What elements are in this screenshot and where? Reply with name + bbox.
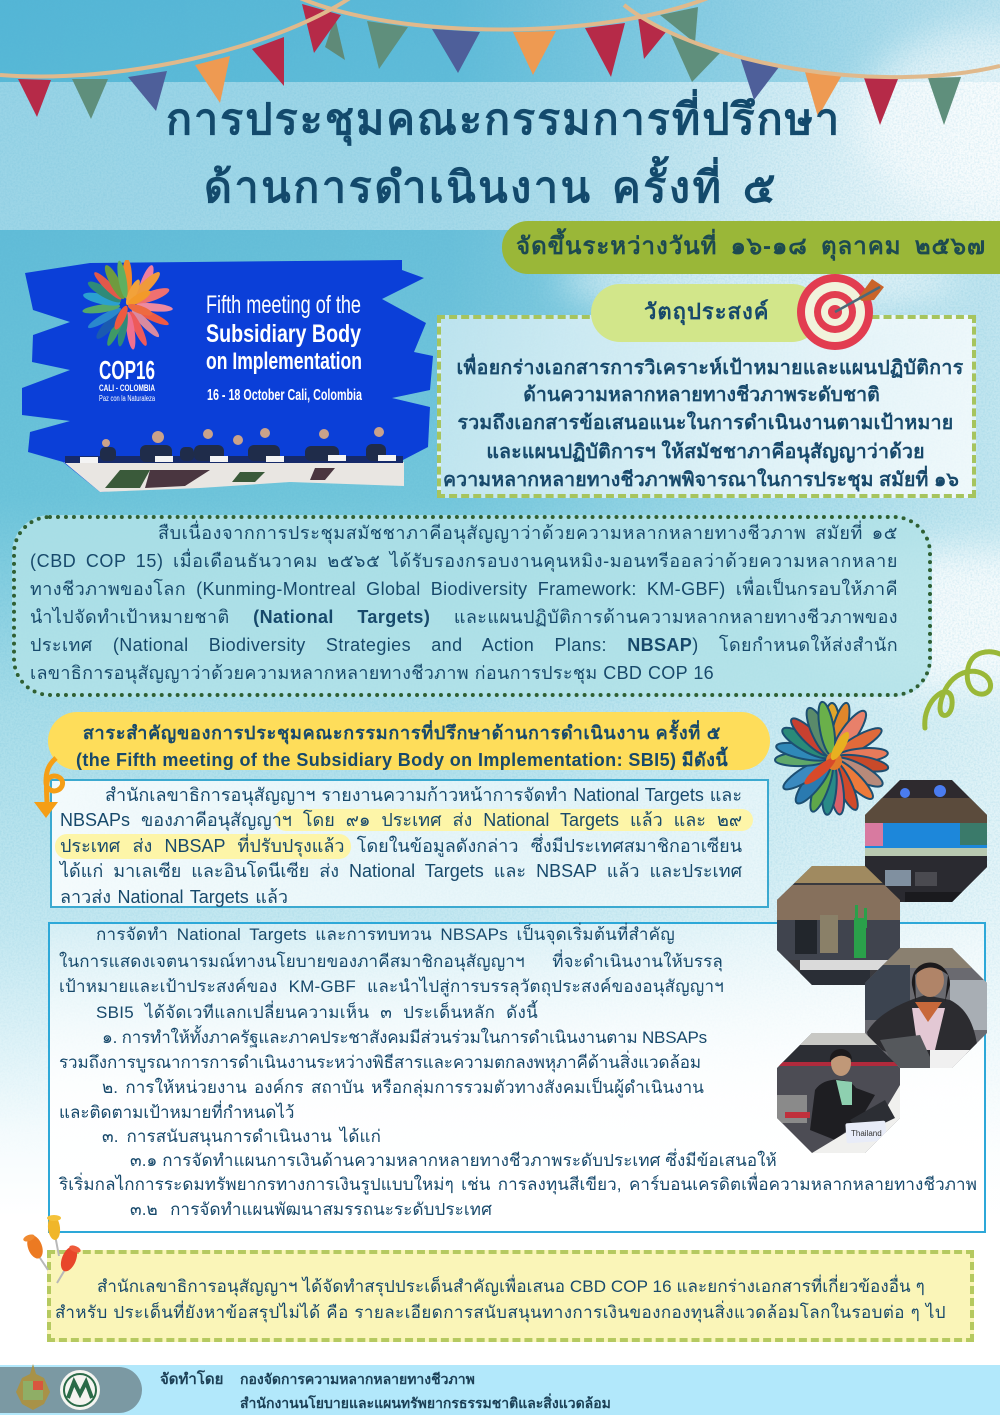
panel: main discussion: การจัดทำ National Targets และการทบทวน NBSAPs เป็นจุดเริ่มต้นที่สำคัญ bbox=[96, 925, 675, 944]
icon: orange curved arrow bbox=[34, 758, 63, 818]
key points heading pill: สาระสำคัญของการประชุมคณะกรรมการที่ปรึกษาด้านการดำเนินงาน ครั้งที่ ๕ bbox=[83, 723, 721, 743]
photo: Thailand delegate bbox=[777, 1033, 900, 1153]
icon: pushpins bbox=[22, 1215, 82, 1283]
panel: background context: สืบเนื่องจากการประชุมสมัชชาภาคีอนุสัญญาว่าด้วยความหลากหลายทางชีวภาพ สมัยที่ ๑๕ bbox=[158, 523, 898, 543]
panel: main discussion: ในการแสดงเจตนารมณ์ทางนโยบายของภาคีสมาชิกอนุสัญญาฯ ที่จะดำเนินงานให้บรรลุ bbox=[59, 952, 723, 971]
footer organiser label: จัดทำโดย bbox=[160, 1371, 223, 1388]
highlight bbox=[275, 809, 753, 831]
panel: conclusion: สำนักเลขาธิการอนุสัญญาฯ ได้จัดทำสรุปประเด็นสำคัญเพื่อเสนอ CBD COP 16 และยกร่างเอกสารที่เกี่ยวข้องอื่น ๆ bbox=[97, 1277, 925, 1296]
COP16 banner image: Subsidiary Body bbox=[206, 320, 361, 348]
bunting flags bbox=[0, 0, 1000, 125]
panel: main discussion: SBI5 ได้จัดเวทีแลกเปลี่ยนความเห็น ๓ ประเด็นหลัก ดังนี้ bbox=[96, 1003, 538, 1022]
panel: main discussion: ๓. การสนับสนุนการดำเนินงาน ได้แก่ bbox=[102, 1127, 381, 1146]
footer organisation names bbox=[240, 1371, 611, 1411]
title: การประชุมคณะกรรมการที่ปรึกษา bbox=[166, 96, 841, 144]
COP16 banner image: 16 - 18 October Cali, Colombia bbox=[207, 387, 362, 404]
footer logo plate bbox=[0, 1367, 142, 1413]
title bbox=[166, 88, 841, 212]
COP16 banner image bbox=[22, 260, 433, 492]
panel: objective: ด้านความหลากหลายทางชีวภาพระดับชาติ bbox=[523, 384, 880, 406]
icon: target with arrow bbox=[797, 274, 884, 350]
panel: main discussion: ๑. การทำให้ทั้งภาครัฐและภาคประชาสังคมมีส่วนร่วมในการดำเนินงานตาม NBSAPs bbox=[102, 1028, 707, 1047]
photo: Thailand delegate: Thailand bbox=[851, 1129, 882, 1138]
photo: delegates raising hands bbox=[777, 866, 900, 986]
COP16 banner image: Paz con la Naturaleza bbox=[99, 394, 155, 403]
panel: main discussion: เป้าหมายและเป้าประสงค์ของ KM-GBF และนำไปสู่การบรรลุวัตถุประสงค์ของอนุสัญญาฯ bbox=[59, 977, 724, 996]
panel: main discussion bbox=[48, 922, 986, 1233]
panel: progress report: ได้แก่ มาเลเซีย และอินโดนีเซีย ส่ง National Targets และ NBSAP แล้ว และประเทศ bbox=[60, 861, 742, 881]
panel: main discussion: รวมถึงการบูรณาการการดำเนินงานระหว่างพิธีสารและความตกลงพหุภาคีด้านสิ่งแวดล้อม bbox=[59, 1053, 701, 1072]
COP16 banner image: on Implementation bbox=[206, 348, 362, 375]
logos bbox=[16, 1364, 100, 1410]
panel: objective: รวมถึงเอกสารข้อเสนอแนะในการดำเนินงานตามเป้าหมาย bbox=[457, 412, 954, 434]
key points heading pill bbox=[48, 712, 770, 770]
date banner bbox=[502, 221, 1000, 274]
icon: decorative flower bbox=[775, 701, 889, 815]
logo: ministry crest bbox=[16, 1364, 50, 1410]
panel: progress report: ประเทศ ส่ง NBSAP ที่ปรับปรุงแล้ว โดยในข้อมูลดังกล่าว ซึ่งมีประเทศสมาชิกอาเซียน bbox=[60, 836, 742, 856]
panel: objective bbox=[437, 315, 976, 498]
COP16 flower logo bbox=[82, 259, 173, 350]
footer organisation names: กองจัดการความหลากหลายทางชีวภาพ bbox=[240, 1371, 475, 1387]
date banner: จัดขึ้นระหว่างวันที่ ๑๖-๑๘ ตุลาคม ๒๕๖๗ bbox=[516, 233, 986, 260]
panel: background context: ทางชีวภาพของโลก (Kunming-Montreal Global Biodiversity Framework: KM-GBF) เพื่อเป็นกรอบให้ภาคี bbox=[30, 579, 898, 599]
COP16 banner image: CALI - COLOMBIA bbox=[99, 383, 155, 393]
footer organisation names: สำนักงานนโยบายและแผนทรัพยากรธรรมชาติและสิ่งแวดล้อม bbox=[240, 1395, 611, 1411]
panel: main discussion: ๒. การให้หน่วยงาน องค์กร สถาบัน หรือกลุ่มการรวมตัวทางสังคมเป็นผู้ดำเนินงาน bbox=[102, 1078, 704, 1097]
foreground decorations bbox=[16, 700, 987, 1410]
objective heading pill bbox=[591, 284, 821, 342]
conference panel people bbox=[100, 444, 386, 462]
panel: main discussion: และติดตามเป้าหมายที่กำหนดไว้ bbox=[59, 1103, 294, 1122]
banner text: COP16 bbox=[99, 355, 155, 385]
panel: progress report bbox=[50, 779, 769, 908]
panel: main discussion: ๓.๑ การจัดทำแผนการเงินด้านความหลากหลายทางชีวภาพระดับประเทศ ซึ่งมีข้อเสนอให้ bbox=[130, 1151, 777, 1170]
highlight bbox=[55, 834, 351, 859]
panel: background context: (CBD COP 15) เมื่อเดือนธันวาคม ๒๕๖๕ ได้รับรองกรอบงานคุนหมิง-มอนทรีออลว่าด้วยความหลากหลาย bbox=[30, 551, 898, 571]
photo: delegate with laptop bbox=[865, 948, 988, 1068]
panel: objective: ความหลากหลายทางชีวภาพพิจารณาในการประชุม สมัยที่ ๑๖ bbox=[443, 469, 959, 491]
key points heading pill: (the Fifth meeting of the Subsidiary Body on Implementation: SBI5) มีดังนี้ bbox=[76, 750, 728, 770]
panel: progress report: สำนักเลขาธิการอนุสัญญาฯ รายงานความก้าวหน้าการจัดทำ National Targets และ bbox=[105, 785, 742, 805]
panel: objective: และแผนปฏิบัติการฯ ให้สมัชชาภาคีอนุสัญญาว่าด้วย bbox=[486, 441, 925, 463]
objective heading pill: วัตถุประสงค์ bbox=[644, 299, 769, 324]
logo: ONEP seal bbox=[60, 1370, 100, 1410]
panel: main discussion: ๓.๒ การจัดทำแผนพัฒนาสมรรถนะระดับประเทศ bbox=[130, 1200, 492, 1219]
panel: conclusion: สำหรับ ประเด็นที่ยังหาข้อสรุปไม่ได้ คือ รายละเอียดการสนับสนุนทางการเงินของกองทุนสิ่งแวดล้อมโลกในรอบต่อ ๆ ไป bbox=[55, 1303, 946, 1322]
panel: background context: เลขาธิการอนุสัญญาว่าด้วยความหลากหลายทางชีวภาพ ก่อนการประชุม CBD COP 16 bbox=[30, 663, 714, 683]
title: ด้านการดำเนินงาน ครั้งที่ ๕ bbox=[204, 164, 778, 212]
COP16 banner image: Fifth meeting of the bbox=[206, 291, 361, 319]
photo: plenary hall bbox=[865, 780, 988, 902]
panel: background context bbox=[12, 515, 932, 697]
footer bbox=[0, 1365, 1000, 1415]
decorative squiggle bbox=[922, 649, 1000, 730]
panel: background context: ประเทศ (National Biodiversity Strategies and Action Plans: NBSAP) โดยกำหนดให้ส่งสำนัก bbox=[30, 635, 898, 655]
panel: conclusion bbox=[47, 1250, 974, 1342]
panel: objective: เพื่อยกร่างเอกสารการวิเคราะห์เป้าหมายและแผนปฏิบัติการ bbox=[456, 357, 964, 379]
panel: progress report: NBSAPs ของภาคีอนุสัญญาฯ โดย ๙๑ ประเทศ ส่ง National Targets แล้ว และ ๒๙ bbox=[60, 810, 742, 830]
panel: background context: นำไปจัดทำเป้าหมายชาติ (National Targets) และแผนปฏิบัติการด้านความหลากหลายทางชีวภาพของ bbox=[30, 607, 898, 627]
panel: main discussion: ริเริ่มกลไกการระดมทรัพยากรทางการเงินรูปแบบใหม่ๆ เช่น การลงทุนสีเขียว, คาร์บอนเครดิตเพื่อความหลากหลายทางชีวภาพ bbox=[59, 1175, 977, 1194]
objective heading and target icon bbox=[591, 274, 884, 350]
panel: progress report: ลาวส่ง National Targets แล้ว bbox=[60, 887, 288, 907]
